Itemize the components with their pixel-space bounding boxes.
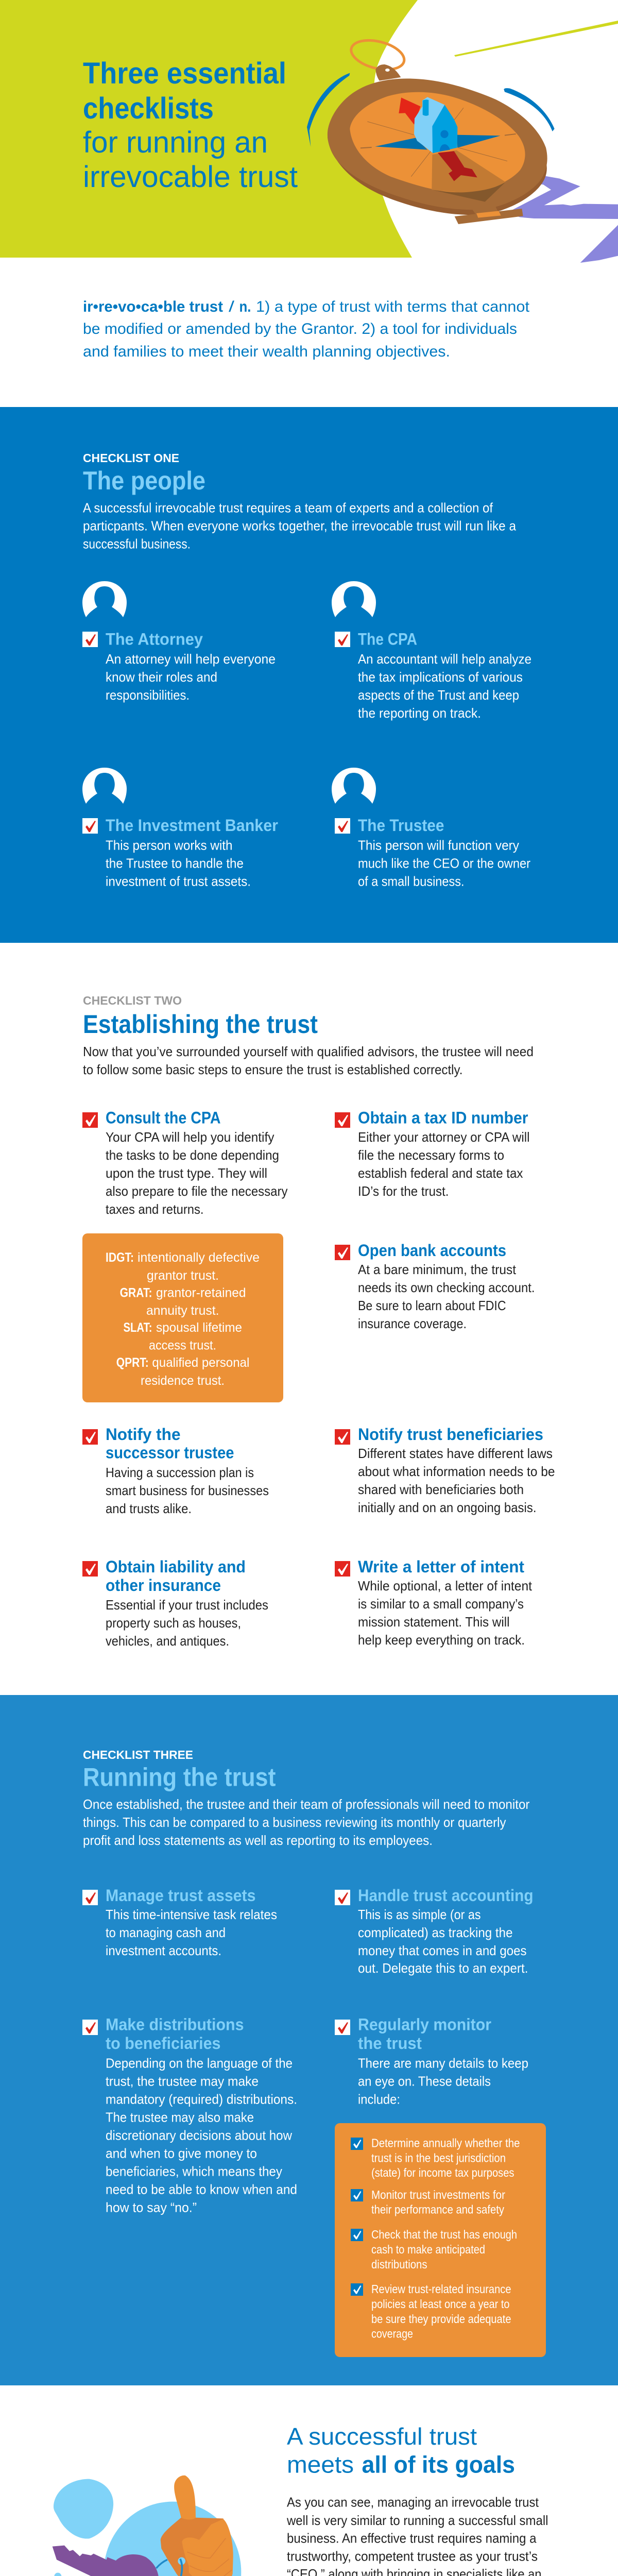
make distributions text: Make distributions — [106, 2015, 244, 2034]
trust type definitions: residence trust. — [141, 1374, 225, 1388]
trust type definitions: grantor trust. — [147, 1268, 219, 1283]
consult the cpa text: Consult the CPA — [106, 1109, 220, 1127]
checklist three background — [0, 1695, 618, 2385]
write a letter of intent text: Write a letter of intent — [358, 1557, 524, 1576]
detail text: distributions — [371, 2258, 427, 2271]
conclusion heading: meets — [287, 2451, 354, 2478]
regularly monitor text: an eye on. These details — [358, 2073, 491, 2089]
make distributions text: mandatory (required) distributions. — [106, 2092, 297, 2107]
panel: checklist two — [82, 994, 555, 1649]
icon: checkbox — [335, 1890, 350, 1905]
title: irrevocable trust — [83, 160, 298, 194]
trust type definitions: spousal lifetime — [156, 1320, 242, 1335]
make distributions text: The trustee may also make — [106, 2109, 254, 2125]
checklist two intro — [83, 1044, 534, 1077]
make distributions text — [106, 2015, 297, 2215]
detail text: be sure they provide adequate — [371, 2312, 511, 2326]
open bank accounts text — [358, 1241, 535, 1331]
trust type definitions: grantor-retained — [156, 1286, 246, 1300]
item: open bank accounts — [335, 1241, 535, 1331]
detail text: Monitor trust investments for — [371, 2188, 505, 2201]
consult the cpa text — [106, 1109, 287, 1217]
trust type definitions: SLAT: — [124, 1320, 152, 1335]
item: write a letter of intent — [335, 1557, 533, 1648]
consult the cpa text: also prepare to file the necessary — [106, 1183, 287, 1199]
definition: be modified or amended by the Grantor. 2) a tool for individuals — [83, 320, 517, 337]
checklist three heading: CHECKLIST THREE — [83, 1748, 193, 1761]
detail text: (state) for income tax purposes — [371, 2166, 514, 2179]
the trustee text: of a small business. — [358, 874, 465, 889]
obtain liability text: vehicles, and antiques. — [106, 1633, 229, 1649]
icon: checkbox — [335, 818, 350, 834]
detail text: cash to make anticipated — [371, 2243, 485, 2256]
notify trust beneficiaries text — [358, 1425, 555, 1515]
notify trust beneficiaries text: about what information needs to be — [358, 1464, 555, 1479]
definition: ir•re•vo•ca•ble trust — [83, 298, 223, 315]
icon: checkbox — [335, 632, 350, 647]
the trustee text — [358, 816, 530, 889]
open bank accounts text: At a bare minimum, the trust — [358, 1262, 517, 1277]
item: the investment banker — [82, 768, 278, 889]
title: checklists — [83, 92, 214, 125]
checklist one intro: particpants. When everyone works together, the irrevocable trust will run like a — [83, 518, 516, 534]
the attorney text: responsibilities. — [106, 687, 190, 703]
obtain liability text — [106, 1557, 268, 1649]
icon: blue checkbox — [351, 2138, 363, 2150]
detail text: Review trust-related insurance — [371, 2282, 511, 2296]
obtain liability text: Obtain liability and — [106, 1557, 246, 1576]
notify the successor trustee text: successor trustee — [106, 1444, 234, 1462]
icon: green motion line — [454, 21, 618, 57]
icon: checkbox — [82, 818, 98, 834]
manage trust assets text: Manage trust assets — [106, 1886, 255, 1905]
detail text: trust is in the best jurisdiction — [371, 2151, 506, 2165]
conclusion heading: A successful trust — [287, 2423, 477, 2450]
item: handle trust accounting — [335, 1886, 534, 1976]
detail: jurisdiction — [351, 2136, 520, 2179]
definition — [83, 298, 530, 360]
conclusion heading — [287, 2423, 515, 2478]
manage trust assets text — [106, 1886, 277, 1958]
detail text: coverage — [371, 2327, 413, 2340]
definition: and families to meet their wealth planning objectives. — [83, 343, 450, 360]
manage trust assets text: to managing cash and — [106, 1925, 226, 1940]
consult the cpa text: taxes and returns. — [106, 1201, 204, 1217]
notify the successor trustee text: and trusts alike. — [106, 1501, 192, 1516]
item: the attorney — [82, 581, 276, 703]
checklist one background — [0, 407, 618, 943]
icon: checkbox — [82, 2020, 98, 2035]
definition: / — [229, 298, 235, 315]
trust type definitions — [106, 1250, 260, 1388]
icon: person — [82, 768, 127, 804]
icon: checkbox — [82, 1112, 98, 1128]
item: manage trust assets — [82, 1886, 277, 1958]
item: the trustee — [332, 768, 530, 889]
handle trust accounting text: This is as simple (or as — [358, 1907, 481, 1922]
checklist three intro — [83, 1797, 530, 1848]
icon: checkbox — [82, 1561, 98, 1577]
icon: checkbox — [335, 1429, 350, 1445]
make distributions text: how to say “no.” — [106, 2200, 197, 2215]
handle trust accounting text: Handle trust accounting — [358, 1886, 534, 1905]
manage trust assets text: This time-intensive task relates — [106, 1907, 277, 1922]
obtain a tax id number text: Either your attorney or CPA will — [358, 1129, 529, 1145]
regularly monitor text: There are many details to keep — [358, 2056, 528, 2071]
open bank accounts text: needs its own checking account. — [358, 1280, 535, 1295]
icon: thumbs up with house key — [53, 2476, 241, 2576]
make distributions text: Depending on the language of the — [106, 2056, 293, 2071]
conclusion body text: As you can see, managing an irrevocable trust — [287, 2495, 539, 2510]
checklist one heading: CHECKLIST ONE — [83, 451, 179, 465]
detail text — [371, 2136, 520, 2179]
item: regularly monitor the trust — [335, 2015, 528, 2107]
detail: investments — [351, 2188, 505, 2216]
the trustee text: The Trustee — [358, 816, 444, 835]
the attorney text: An attorney will help everyone — [106, 651, 276, 667]
callout: monitoring details — [335, 2123, 546, 2357]
checklist two intro: Now that you’ve surrounded yourself with qualified advisors, the trustee will need — [83, 1044, 534, 1059]
the attorney text: know their roles and — [106, 669, 217, 685]
regularly monitor text: include: — [358, 2092, 400, 2107]
item: obtain liability and other insurance — [82, 1557, 268, 1649]
icon: purple lightning path — [506, 174, 618, 263]
checklist two heading: CHECKLIST TWO — [83, 994, 182, 1007]
obtain a tax id number text — [358, 1109, 529, 1199]
write a letter of intent text: help keep everything on track. — [358, 1632, 525, 1648]
checklist two heading — [83, 994, 318, 1039]
open bank accounts text: Be sure to learn about FDIC — [358, 1298, 506, 1313]
manage trust assets text: investment accounts. — [106, 1943, 221, 1958]
icon: checkbox — [335, 1112, 350, 1128]
conclusion body text: business. An effective trust requires naming a — [287, 2531, 537, 2546]
item: notify the successor trustee — [82, 1425, 269, 1516]
make distributions text: beneficiaries, which means they — [106, 2164, 282, 2179]
title: for running an — [83, 126, 268, 159]
item: notify trust beneficiaries — [335, 1425, 555, 1515]
obtain a tax id number text: ID’s for the trust. — [358, 1183, 449, 1199]
panel: conclusion — [53, 2423, 548, 2576]
the trustee text: This person will function very — [358, 838, 519, 853]
regularly monitor text — [358, 2015, 528, 2107]
consult the cpa text: Your CPA will help you identify — [106, 1129, 274, 1145]
write a letter of intent text — [358, 1557, 533, 1648]
icon: checkbox — [335, 1561, 350, 1577]
handle trust accounting text: money that comes in and goes — [358, 1943, 526, 1958]
detail text: Determine annually whether the — [371, 2136, 520, 2149]
checklist one heading: The people — [83, 466, 205, 495]
checklist one intro — [83, 500, 516, 551]
detail: insurance — [351, 2282, 511, 2340]
trust type definitions: annuity trust. — [146, 1303, 219, 1318]
the cpa text: the reporting on track. — [358, 705, 481, 721]
item: consult the cpa — [82, 1109, 287, 1217]
make distributions text: trust, the trustee may make — [106, 2073, 259, 2089]
trust type definitions: GRAT: — [120, 1286, 152, 1300]
notify trust beneficiaries text: Notify trust beneficiaries — [358, 1425, 543, 1444]
conclusion body text: trustworthy, competent trustee as your trust’s — [287, 2548, 538, 2564]
checklist three intro: Once established, the trustee and their team of professionals will need to monitor — [83, 1797, 530, 1812]
the investment banker text — [106, 816, 278, 889]
the investment banker text: investment of trust assets. — [106, 874, 251, 889]
the investment banker text: The Investment Banker — [106, 816, 278, 835]
icon: checkbox — [82, 1890, 98, 1905]
panel: checklist one — [0, 407, 618, 943]
notify trust beneficiaries text: Different states have different laws — [358, 1446, 553, 1461]
write a letter of intent text: While optional, a letter of intent — [358, 1578, 533, 1594]
trust type definitions: access trust. — [149, 1338, 216, 1353]
detail: cash — [351, 2228, 517, 2271]
obtain liability text: property such as houses, — [106, 1615, 241, 1631]
write a letter of intent text: is similar to a small company’s — [358, 1596, 524, 1612]
detail text — [371, 2282, 511, 2340]
the cpa text — [358, 630, 531, 721]
checklist two heading: Establishing the trust — [83, 1010, 318, 1039]
hero panel — [0, 0, 618, 263]
notify the successor trustee text: Having a succession plan is — [106, 1465, 254, 1480]
handle trust accounting text: out. Delegate this to an expert. — [358, 1960, 528, 1976]
write a letter of intent text: mission statement. This will — [358, 1614, 510, 1630]
notify trust beneficiaries text: shared with beneficiaries both — [358, 1482, 524, 1497]
icon: checkbox — [82, 1429, 98, 1445]
icon: person — [332, 768, 376, 804]
obtain a tax id number text: Obtain a tax ID number — [358, 1109, 528, 1127]
checklist three intro: things. This can be compared to a business reviewing its monthly or quarterly — [83, 1815, 506, 1830]
conclusion body text — [286, 2495, 548, 2576]
handle trust accounting text — [358, 1886, 534, 1976]
checklist two intro: to follow some basic steps to ensure the trust is established correctly. — [83, 1062, 462, 1077]
detail text — [371, 2188, 505, 2216]
icon: person — [82, 581, 127, 617]
checklist three heading: Running the trust — [83, 1763, 276, 1792]
obtain liability text: other insurance — [106, 1576, 221, 1595]
title: Three essential — [83, 57, 286, 90]
conclusion body text: well is very similar to running a successful small — [286, 2513, 548, 2528]
definition: 1) a type of trust with terms that cannot — [256, 298, 530, 315]
detail text: their performance and safety — [371, 2203, 504, 2216]
trust type definitions: IDGT: — [106, 1250, 134, 1265]
the attorney text — [106, 630, 276, 703]
trust type definitions: QPRT: — [116, 1355, 149, 1370]
detail text: Check that the trust has enough — [371, 2228, 517, 2241]
icon: checkbox — [335, 1245, 350, 1260]
title — [83, 57, 298, 194]
the investment banker text: the Trustee to handle the — [106, 855, 244, 871]
make distributions text: discretionary decisions about how — [106, 2128, 292, 2143]
icon: person — [332, 581, 376, 617]
icon: blue checkbox — [351, 2189, 363, 2201]
checklist one intro: successful business. — [83, 536, 191, 551]
trust type definitions: qualified personal — [152, 1355, 249, 1370]
the cpa text: An accountant will help analyze — [358, 651, 531, 667]
the cpa text: aspects of the Trust and keep — [358, 687, 519, 703]
checklist one heading — [83, 451, 205, 495]
item: obtain a tax id number — [335, 1109, 529, 1199]
checklist one intro: A successful irrevocable trust requires a team of experts and a collection of — [83, 500, 493, 515]
panel: checklist three — [0, 1695, 618, 2385]
callout background — [335, 2123, 546, 2357]
consult the cpa text: upon the trust type. They will — [106, 1165, 267, 1181]
make distributions text: need to be able to know when and — [106, 2181, 297, 2197]
definition: n. — [239, 298, 251, 315]
the trustee text: much like the CEO or the owner — [358, 855, 530, 871]
obtain a tax id number text: file the necessary forms to — [358, 1147, 504, 1163]
obtain a tax id number text: establish federal and state tax — [358, 1165, 523, 1181]
detail text — [371, 2228, 517, 2271]
callout: trust types — [82, 1233, 283, 1402]
notify the successor trustee text: Notify the — [106, 1425, 180, 1444]
regularly monitor text: the trust — [358, 2034, 422, 2053]
trust type definitions: intentionally defective — [138, 1250, 260, 1265]
hero green background — [0, 0, 418, 258]
notify the successor trustee text — [106, 1425, 269, 1516]
detail text: policies at least once a year to — [371, 2297, 510, 2311]
the cpa text: The CPA — [358, 630, 417, 648]
open bank accounts text: Open bank accounts — [358, 1241, 506, 1260]
handle trust accounting text: complicated) as tracking the — [358, 1925, 513, 1940]
the attorney text: The Attorney — [106, 630, 203, 648]
open bank accounts text: insurance coverage. — [358, 1316, 467, 1331]
icon: blue checkbox — [351, 2229, 363, 2241]
regularly monitor text: Regularly monitor — [358, 2015, 491, 2034]
obtain liability text: Essential if your trust includes — [106, 1597, 268, 1613]
the cpa text: the tax implications of various — [358, 669, 523, 685]
consult the cpa text: the tasks to be done depending — [106, 1147, 279, 1163]
conclusion heading: all of its goals — [362, 2451, 515, 2478]
callout background — [82, 1233, 283, 1402]
checklist three heading — [83, 1748, 276, 1792]
item: the cpa — [332, 581, 531, 721]
notify the successor trustee text: smart business for businesses — [106, 1483, 269, 1498]
notify trust beneficiaries text: initially and on an ongoing basis. — [358, 1500, 537, 1515]
icon: blue checkbox — [351, 2283, 363, 2296]
item: make distributions to beneficiaries — [82, 2015, 297, 2215]
make distributions text: to beneficiaries — [106, 2034, 220, 2053]
icon: checkbox — [335, 2020, 350, 2035]
icon: compass — [307, 36, 555, 224]
make distributions text: and when to give money to — [106, 2145, 257, 2161]
checklist three intro: profit and loss statements as well as reporting to its employees. — [83, 1833, 433, 1848]
the investment banker text: This person works with — [106, 838, 233, 853]
icon: checkbox — [82, 632, 98, 647]
